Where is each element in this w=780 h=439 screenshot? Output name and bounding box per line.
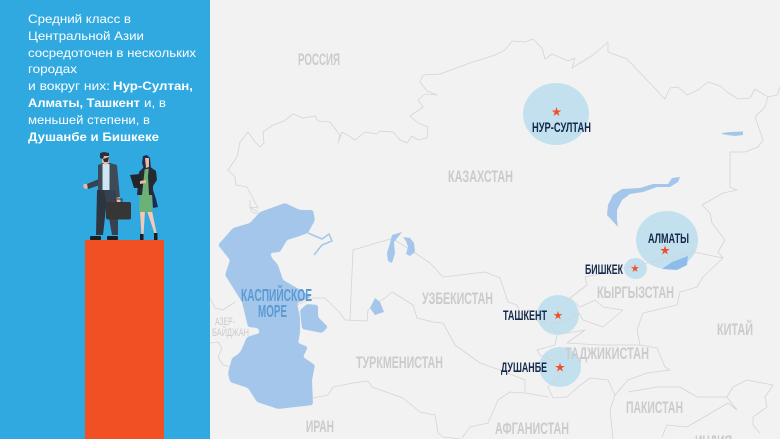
- text block: intro: городах: [28, 62, 77, 76]
- country labels: КАЗАХСТАН: [448, 168, 513, 186]
- text block: intro: Нур-Султан,: [113, 79, 193, 93]
- label: Каспийское море: КАСПИЙСКОЕ: [241, 284, 312, 305]
- country labels: УЗБЕКИСТАН: [422, 290, 493, 308]
- country labels: АФГАНИСТАН: [495, 420, 569, 438]
- country labels: ИРАН: [306, 418, 334, 436]
- country labels: ТУРКМЕНИСТАН: [356, 354, 443, 372]
- text block: intro: [28, 12, 196, 144]
- city circle: Бишкек: [624, 258, 647, 279]
- Ural river arm: [308, 233, 332, 255]
- country borders: [210, 39, 780, 439]
- Lake Zaysan: [722, 132, 743, 136]
- text block: intro: Алматы, Ташкент: [28, 96, 140, 110]
- city labels: АЛМАТЫ: [648, 230, 689, 246]
- star: Душанбе: [555, 362, 565, 372]
- Sarygamysh lake: [370, 298, 384, 315]
- country labels: КИТАЙ: [717, 320, 753, 339]
- panel: blue sidebar: [0, 0, 210, 439]
- map: [210, 39, 780, 439]
- city circle: Душанбе: [539, 347, 581, 387]
- Lake Issyk-Kul: [662, 256, 688, 270]
- text block: intro: и вокруг них:: [28, 79, 110, 93]
- city circle: Нур-Султан: [523, 83, 589, 145]
- text block: intro: меньшей степени, в: [28, 113, 150, 127]
- Caspian Sea: [218, 203, 315, 409]
- city labels: ДУШАНБЕ: [501, 359, 547, 375]
- country labels: ПАКИСТАН: [626, 399, 683, 417]
- text block: intro: Центральной Азии: [28, 29, 144, 43]
- city labels: [501, 119, 689, 375]
- country labels: БАЙДЖАН: [212, 326, 249, 339]
- star: Нур-Султан: [552, 107, 561, 116]
- city labels: БИШКЕК: [585, 261, 623, 277]
- Lake Balkhash: [607, 177, 680, 227]
- star: Ташкент: [554, 311, 562, 319]
- label: Каспийское море: МОРЕ: [258, 301, 287, 321]
- country labels: КЫРГЫЗСТАН: [597, 284, 674, 302]
- city labels: НУР-СУЛТАН: [532, 119, 591, 135]
- star: Бишкек: [631, 264, 639, 272]
- Kara-Bogaz-Gol: [300, 304, 328, 333]
- country labels: ТАДЖИКИСТАН: [565, 345, 649, 363]
- text block: intro: и, в: [144, 96, 166, 110]
- city circle: Алматы: [636, 211, 698, 269]
- text block: intro: Душанбе и Бишкеке: [28, 130, 159, 144]
- red column: [85, 240, 164, 439]
- star: Алматы: [660, 246, 670, 255]
- country labels: [212, 51, 753, 439]
- city circle: Ташкент: [537, 295, 579, 335]
- country labels: РОССИЯ: [298, 51, 340, 69]
- text block: intro: сосредоточен в нескольких: [28, 46, 196, 60]
- text block: intro: Средний класс в: [28, 12, 131, 26]
- label: Каспийское море: [241, 284, 312, 321]
- illustration: woman with tablet: [130, 155, 158, 240]
- city labels: ТАШКЕНТ: [503, 307, 547, 323]
- country labels: АЗЕР-: [215, 316, 235, 328]
- Aral Sea: [387, 232, 415, 263]
- illustration: man with briefcase: [83, 152, 131, 240]
